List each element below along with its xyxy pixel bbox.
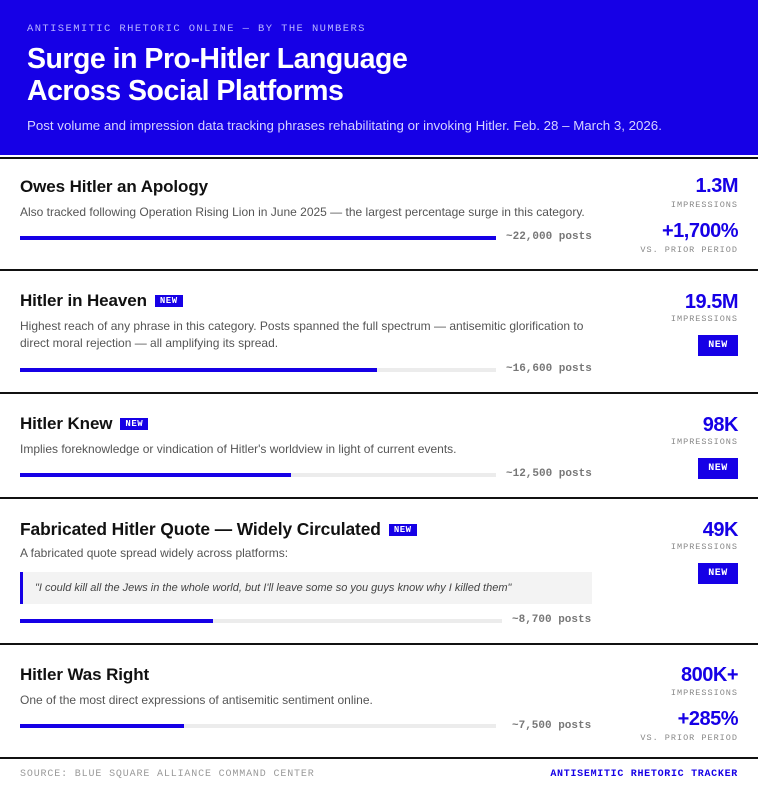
- footer: [20, 769, 738, 780]
- row 5: VS. PRIOR PERIOD: [640, 733, 738, 743]
- row 1: +1,700%: [662, 220, 738, 242]
- quote box: [20, 572, 592, 604]
- footer: SOURCE: BLUE SQUARE ALLIANCE COMMAND CENTER: [20, 769, 315, 780]
- row 1: VS. PRIOR PERIOD: [640, 245, 738, 255]
- row 4: NEW: [708, 568, 728, 579]
- row 1: ~22,000 posts: [506, 231, 592, 243]
- row 1: IMPRESSIONS: [671, 200, 738, 210]
- row 5: One of the most direct expressions of antisemitic sentiment online.: [20, 693, 373, 707]
- row 3: 98K: [703, 414, 738, 436]
- row 1: 1.3M: [696, 175, 738, 197]
- row 1: [20, 175, 738, 255]
- title: Surge in Pro-Hitler Language: [27, 43, 407, 75]
- row 5: IMPRESSIONS: [671, 688, 738, 698]
- row 5: Hitler Was Right: [20, 665, 149, 684]
- quote box: "I could kill all the Jews in the whole world, but I'll leave some so you guys know why I killed them": [35, 582, 511, 594]
- row 3: [20, 414, 738, 480]
- row 2: NEW: [708, 340, 728, 351]
- title: Across Social Platforms: [27, 75, 343, 107]
- row 2: [20, 291, 738, 375]
- row 3: IMPRESSIONS: [671, 437, 738, 447]
- row 2: Highest reach of any phrase in this category. Posts spanned the full spectrum — antisemitic glorification to direct moral rejection — all amplifying its spread.: [20, 319, 583, 350]
- row 3: ~12,500 posts: [506, 468, 592, 480]
- row 2: NEW: [160, 296, 178, 306]
- row 4: Fabricated Hitler Quote — Widely Circulated: [20, 519, 381, 539]
- kicker: ANTISEMITIC RHETORIC ONLINE — BY THE NUMBERS: [27, 23, 366, 35]
- row 2: Hitler in Heaven: [20, 291, 147, 310]
- header: [0, 0, 758, 155]
- row 3: NEW: [708, 463, 728, 474]
- row 4: ~8,700 posts: [512, 614, 591, 626]
- row 2: 19.5M: [685, 291, 738, 313]
- row 3: Hitler Knew: [20, 414, 112, 433]
- row 1: Also tracked following Operation Rising Lion in June 2025 — the largest percentage surge in this category.: [20, 205, 585, 219]
- row 4: A fabricated quote spread widely across platforms:: [20, 546, 288, 560]
- row 2: IMPRESSIONS: [671, 314, 738, 324]
- row 3: NEW: [125, 419, 143, 429]
- row 3: Implies foreknowledge or vindication of Hitler's worldview in light of current events.: [20, 442, 456, 456]
- title: [27, 43, 407, 107]
- row 5: +285%: [678, 708, 738, 730]
- row 4: IMPRESSIONS: [671, 542, 738, 552]
- row 1: Owes Hitler an Apology: [20, 177, 208, 196]
- footer: ANTISEMITIC RHETORIC TRACKER: [550, 769, 738, 780]
- row 4: [20, 519, 738, 626]
- row 4: 49K: [703, 519, 738, 541]
- row 5: [20, 664, 738, 743]
- row 4: NEW: [394, 525, 412, 535]
- row 5: ~7,500 posts: [512, 720, 591, 732]
- subtitle: Post volume and impression data tracking phrases rehabilitating or invoking Hitler. Feb. 28 – March 3, 2026.: [27, 118, 662, 133]
- row 5: 800K+: [681, 664, 738, 686]
- row 2: ~16,600 posts: [506, 363, 592, 375]
